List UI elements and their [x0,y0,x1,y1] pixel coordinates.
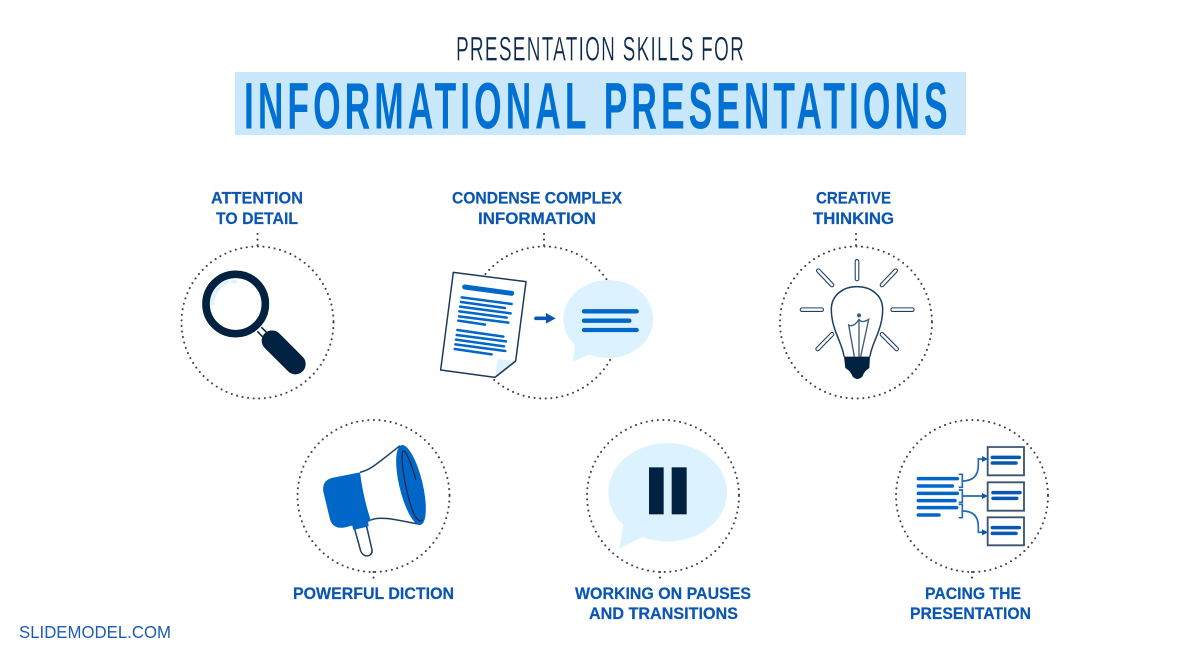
dotted circle [468,246,620,398]
dotted circle [896,420,1048,572]
heading: PACING THE [925,585,1021,603]
connector [543,234,545,246]
title [235,30,966,143]
panel: attention to detail [182,190,334,398]
panel: pacing the presentation [896,420,1048,623]
icon: megaphone [323,442,432,556]
icon: light bulb [802,261,912,379]
dotted circle [780,246,932,398]
dotted circle [298,420,450,572]
heading: CREATIVE [816,190,891,208]
connector [971,572,973,581]
dotted circle [182,246,334,398]
brand footer: SLIDEMODEL.COM [19,622,171,642]
title line one: PRESENTATION SKILLS FOR [456,30,744,68]
connector [659,572,661,581]
heading: POWERFUL DICTION [293,585,454,603]
panel: condense complex information [441,190,653,398]
panel: powerful diction [293,420,454,603]
heading second line: THINKING [813,210,894,228]
panel: working on pauses and transitions [575,420,751,623]
icon: magnifying glass [206,274,295,364]
connector [855,234,857,246]
title highlight band [235,72,966,135]
heading second line: AND TRANSITIONS [589,605,738,623]
icon: document to speech bubble [441,272,653,377]
heading second line: TO DETAIL [216,210,298,228]
panel: creative thinking [780,190,932,398]
heading second line: INFORMATION [478,210,596,228]
dotted circle [587,420,739,572]
heading: CONDENSE COMPLEX [452,190,622,208]
connector [372,572,375,581]
icon: text mapped to slides [918,447,1024,545]
icon: pause speech bubble [608,443,727,549]
title line two: INFORMATIONAL PRESENTATIONS [244,70,948,143]
heading: WORKING ON PAUSES [575,585,751,603]
connector [256,234,259,246]
heading: ATTENTION [211,190,303,208]
heading second line: PRESENTATION [910,605,1031,623]
